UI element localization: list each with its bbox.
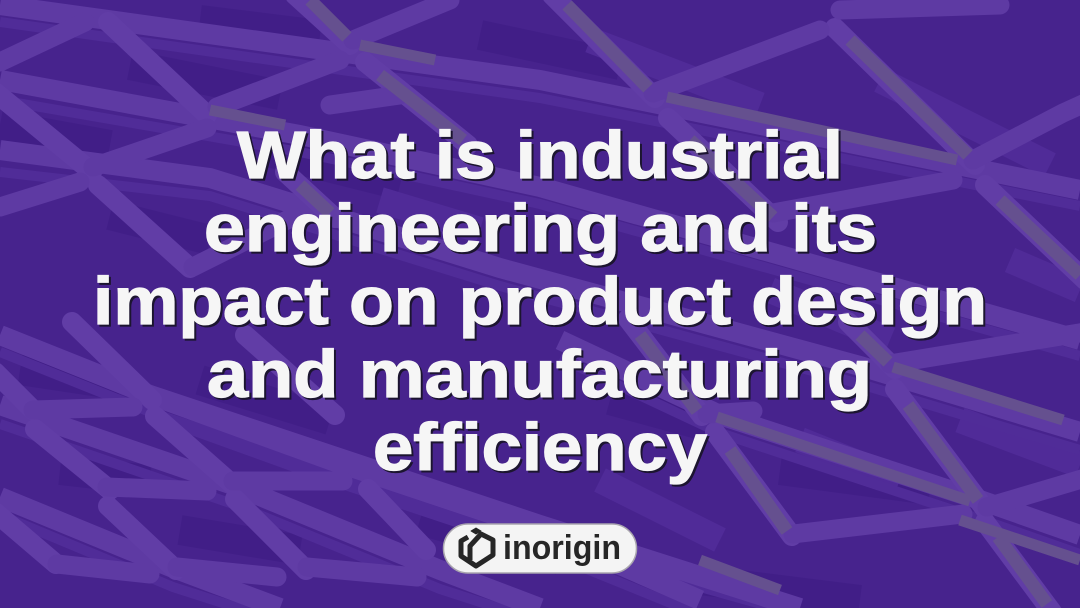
title: What is industrial <box>237 118 843 193</box>
icon: hexagon cube logo mark <box>461 528 493 566</box>
logo badge <box>444 524 636 573</box>
title: engineering and its <box>204 191 877 266</box>
title: impact on product design <box>93 264 987 339</box>
title <box>93 118 987 485</box>
wordmark: inorigin <box>503 529 621 567</box>
title: efficiency <box>373 410 707 485</box>
title: and manufacturing <box>207 337 872 412</box>
